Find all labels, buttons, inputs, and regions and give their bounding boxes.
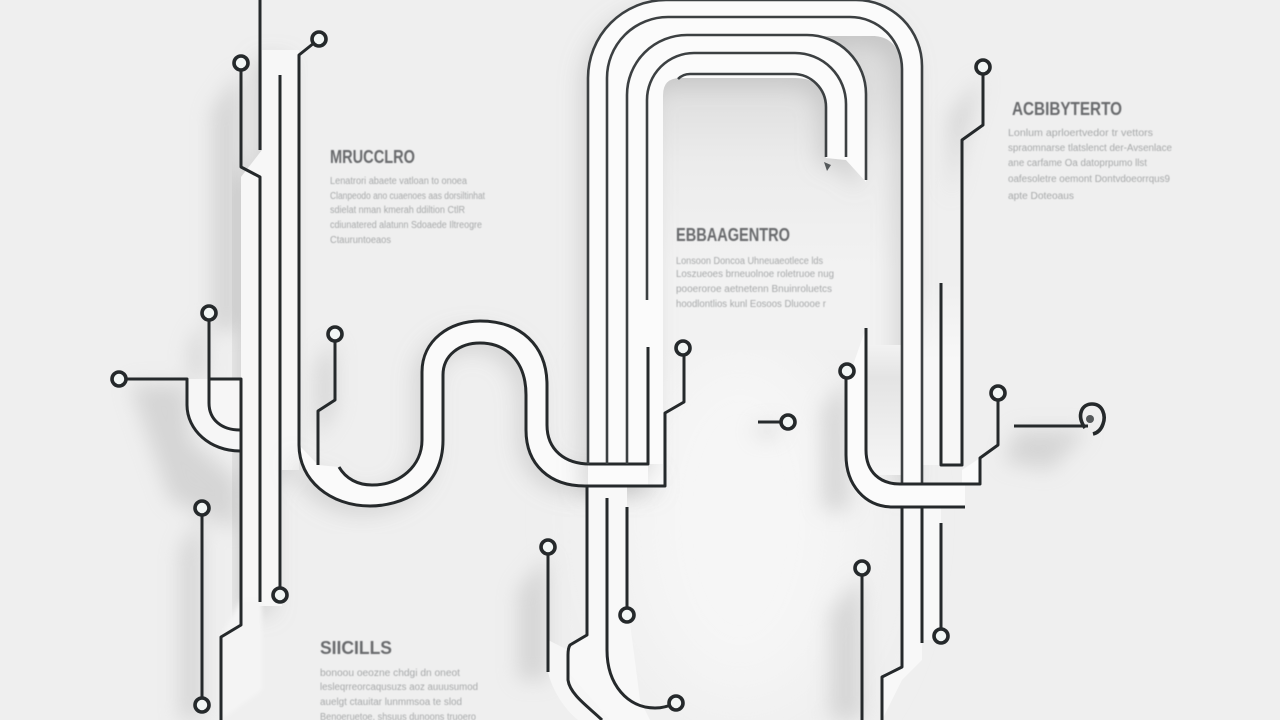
white ribbon: bottom centre leg bbox=[568, 486, 650, 720]
trace: arch second bbox=[607, 17, 902, 484]
trace: curved to bottom node bbox=[607, 498, 676, 708]
body copy: Ctauruntoeaos bbox=[330, 235, 391, 246]
trace: S curve lower bbox=[299, 39, 684, 506]
body copy: bonoou oeozne chdgi dn oneot bbox=[320, 668, 460, 679]
arch interior shading bbox=[663, 36, 901, 350]
trace: arch outer bbox=[588, 0, 922, 484]
text block: upper left bbox=[330, 147, 485, 246]
trace: long bus to lower left bbox=[241, 63, 260, 602]
trace: bent stub bbox=[318, 334, 335, 465]
body copy: apte Doteoaus bbox=[1008, 191, 1074, 202]
lower centre traces bbox=[548, 486, 676, 720]
trace: right outer elbow bbox=[846, 371, 965, 507]
trace: left elbow bbox=[119, 379, 240, 451]
trace: below elbow bent bbox=[882, 507, 902, 720]
white ribbon: bottom left of centre bbox=[548, 640, 610, 720]
white ribbon: S curve bbox=[299, 321, 665, 506]
body copy: oafesoletre oemont Dontvdoeorrqus9 bbox=[1008, 174, 1170, 185]
trace: vertical to bottom node bbox=[278, 75, 282, 595]
white ribbon: left vertical bundle bbox=[241, 50, 299, 606]
heading: SIICILLS bbox=[320, 638, 392, 658]
body copy bbox=[320, 668, 478, 720]
trace: S curve upper bbox=[339, 321, 648, 485]
body copy: ane carfame Oa datoprpumo llst bbox=[1008, 158, 1147, 169]
broken arch tip bbox=[824, 162, 831, 171]
body copy: cdiunatered alatunn Sdoaede Iltreogre bbox=[330, 220, 482, 231]
body copy: Loszueoes brneuolnoe roletruoe nug bbox=[676, 269, 834, 280]
right inner shaded column bbox=[867, 345, 901, 475]
body copy: lesleqrreorcaqusuzs aoz auuusumod bbox=[320, 682, 478, 693]
body copy: pooeroroe aetnetenn Bnuinroluetcs bbox=[676, 284, 832, 295]
background glow bbox=[620, 330, 860, 710]
trace: upper right bent bbox=[941, 67, 983, 465]
trace: right inner elbow bbox=[866, 328, 998, 484]
long cast shadows bbox=[130, 70, 1088, 720]
S-curve traces bbox=[299, 39, 684, 506]
trace: left of centre drop bbox=[546, 547, 550, 672]
white ribbon: right elbow bbox=[846, 328, 980, 507]
right traces bbox=[758, 67, 1088, 720]
connector nodes bbox=[112, 32, 1005, 712]
arch traces bbox=[588, 0, 922, 484]
body copy: spraomnarse tlatslenct der-Avsenlace bbox=[1008, 143, 1172, 154]
white ribbon: lower left tail bbox=[221, 600, 262, 720]
body copy: Lonlum aprloertvedor tr vettors bbox=[1008, 128, 1153, 139]
trace: centre node drop bbox=[626, 507, 628, 615]
trace: below elbow to node bbox=[940, 523, 942, 636]
trace: below elbow straight bbox=[920, 507, 924, 643]
body copy: auelgt ctauitar lunmmsoa te slod bbox=[320, 697, 462, 708]
trace: far right connector bbox=[1014, 424, 1088, 428]
body copy bbox=[676, 256, 834, 310]
text block: bottom left bbox=[320, 638, 478, 720]
trace: horizontal branch bbox=[209, 379, 241, 720]
body copy: Lenatrori abaete vatloan to onoea bbox=[330, 176, 467, 187]
trace: centre short connector bbox=[758, 420, 782, 424]
body copy bbox=[330, 176, 485, 246]
text block: upper right bbox=[1008, 99, 1172, 202]
left circuit traces bbox=[119, 0, 335, 720]
trace: arch inner bbox=[678, 74, 826, 157]
trace: elbow bus bbox=[209, 313, 240, 430]
heading: EBBAAGENTRO bbox=[676, 225, 790, 245]
white ribbon: bottom right leg bbox=[882, 507, 941, 720]
white ribbon: right column bbox=[922, 283, 962, 465]
trace: arch third bbox=[627, 35, 866, 464]
body copy bbox=[1008, 128, 1172, 202]
heading: MRUCCLRO bbox=[330, 147, 415, 167]
trace: lone vertical bbox=[200, 508, 204, 705]
body copy: Clanpeodo ano cuaenoes aas dorsiltinhat bbox=[330, 191, 485, 202]
white ribbon: main arch bbox=[588, 0, 922, 486]
text block: centre bbox=[676, 225, 834, 310]
body copy: hoodlontlios kunl Eosoos Dluoooe r bbox=[676, 299, 827, 310]
trace: arch fourth bbox=[647, 53, 846, 300]
heading: ACBIBYTERTO bbox=[1012, 99, 1122, 119]
white ribbon: left elbow bbox=[187, 379, 241, 450]
body copy: sdielat nman kmerah ddiltion CtlR bbox=[330, 205, 465, 216]
trace: centre bent leg bbox=[568, 486, 602, 720]
trace: lone right drop bbox=[860, 568, 864, 720]
trace: top left stub bbox=[258, 0, 262, 150]
body copy: Lonsoon Doncoa Uhneuaeotlece lds bbox=[676, 256, 823, 267]
icon: spiral end node bbox=[1081, 404, 1104, 434]
